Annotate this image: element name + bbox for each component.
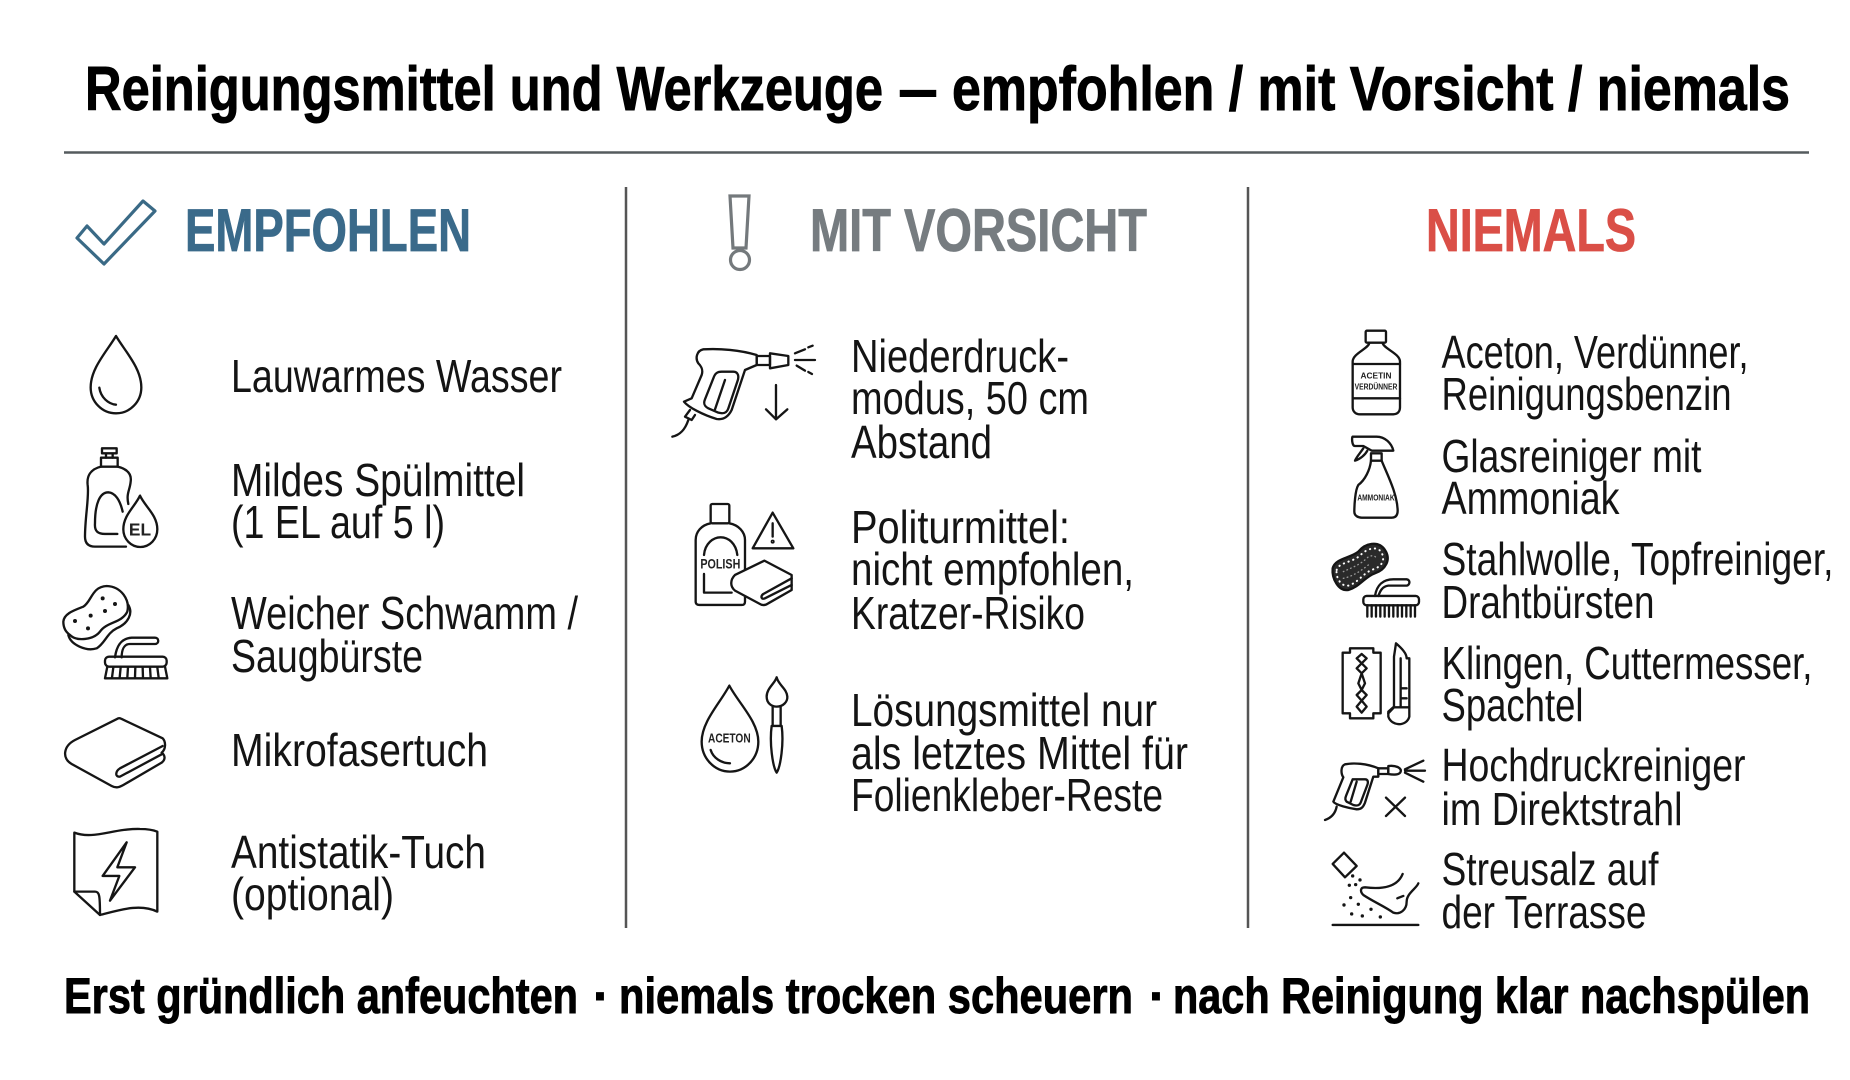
- text: weicher schwamm: Saugbürste: [231, 630, 423, 682]
- text: hochdruckreiniger: im Direktstrahl: [1442, 783, 1682, 835]
- text: glasreiniger: [1442, 430, 1702, 524]
- text: aceton: Aceton, Verdünner,: [1442, 326, 1748, 378]
- icon: high pressure washer crossed: [1325, 761, 1425, 820]
- text: stahlwolle: Drahtbürsten: [1442, 576, 1654, 628]
- title: —: [900, 55, 936, 124]
- icon: acetone drop and brush: ACETON: [708, 731, 751, 745]
- text: weicher schwamm: [231, 587, 578, 682]
- text: lösungsmittel: Lösungsmittel nur: [851, 684, 1157, 736]
- text: glasreiniger: Ammoniak: [1442, 472, 1620, 524]
- text: antistatik-tuch: (optional): [231, 868, 394, 920]
- icon: spray bottle: AMMONIAK: [1357, 493, 1395, 502]
- text: mildes spülmittel: (1 EL auf 5 l): [231, 496, 445, 548]
- text: antistatik-tuch: Antistatik-Tuch: [231, 826, 486, 878]
- footer note: niemals trocken scheuern: [619, 968, 1133, 1024]
- icon: steel wool and wire brush: [1333, 544, 1419, 617]
- text: niederdruck: Abstand: [851, 416, 992, 468]
- text: weicher schwamm: Weicher Schwamm /: [231, 587, 578, 639]
- text: glasreiniger: Glasreiniger mit: [1442, 430, 1702, 482]
- icon: solvent bottle: [1353, 331, 1400, 414]
- title: Reinigungsmittel und Werkzeuge: [85, 55, 883, 124]
- icon: antistatic cloth: [74, 829, 157, 915]
- text: mikrofasertuch: Mikrofasertuch: [231, 724, 488, 776]
- text: lösungsmittel: [851, 684, 1188, 821]
- text: antistatik-tuch: [231, 826, 486, 920]
- icon: exclamation mark: [730, 196, 750, 270]
- text: hochdruckreiniger: [1442, 739, 1746, 835]
- text: lösungsmittel: Folienkleber-Reste: [851, 769, 1163, 821]
- text: hochdruckreiniger: Hochdruckreiniger: [1442, 739, 1746, 791]
- icon: solvent bottle: VERDÜNNER: [1355, 382, 1397, 392]
- icon: microfiber towel: [65, 718, 165, 787]
- icon: sponge and brush: [63, 586, 167, 678]
- footer note: Erst gründlich anfeuchten: [64, 968, 578, 1024]
- icon: polish bottle with warning: POLISH: [700, 556, 740, 572]
- text: niederdruck: modus, 50 cm: [851, 372, 1089, 424]
- panel: niemals: [1325, 197, 1834, 938]
- text: streusalz: der Terrasse: [1442, 886, 1646, 938]
- text: politurmittel: [851, 501, 1134, 639]
- text: streusalz: [1442, 843, 1659, 938]
- icon: road salt on terrace: [1333, 853, 1418, 925]
- text: mildes spülmittel: Mildes Spülmittel: [231, 454, 525, 506]
- panel: mit vorsicht: [672, 196, 1188, 821]
- text: niederdruck: [851, 330, 1089, 468]
- icon: solvent bottle: ACETIN: [1360, 371, 1391, 381]
- icon: dish soap bottle with drop: EL: [129, 520, 151, 540]
- text: klingen: Spachtel: [1442, 679, 1584, 731]
- heading: mit vorsicht: MIT VORSICHT: [810, 197, 1147, 264]
- text: aceton: [1442, 326, 1748, 420]
- icon: spray bottle: [1352, 437, 1398, 518]
- icon: check mark: [77, 201, 155, 264]
- text: lösungsmittel: als letztes Mittel für: [851, 727, 1188, 779]
- heading: niemals: NIEMALS: [1426, 197, 1636, 264]
- icon: acetone drop and brush: [702, 677, 787, 773]
- footer note: ·: [1149, 968, 1166, 1024]
- footer note: [64, 968, 1810, 1024]
- text: politurmittel: nicht empfohlen,: [851, 543, 1134, 595]
- icon: razor blade and cutter: [1343, 643, 1409, 724]
- text: klingen: [1442, 637, 1812, 731]
- text: lauwarmes wasser: Lauwarmes Wasser: [231, 350, 562, 402]
- heading: empfohlen: EMPFOHLEN: [185, 197, 471, 264]
- icon: water drop: [91, 336, 141, 413]
- panel: empfohlen: [63, 197, 578, 920]
- text: politurmittel: Politurmittel:: [851, 501, 1070, 553]
- icon: pressure washer low pressure: [672, 346, 815, 437]
- footer note: ·: [593, 968, 610, 1024]
- text: politurmittel: Kratzer-Risiko: [851, 587, 1085, 639]
- text: streusalz: Streusalz auf: [1442, 843, 1659, 895]
- text: aceton: Reinigungsbenzin: [1442, 368, 1732, 420]
- title: [85, 55, 1790, 124]
- text: mildes spülmittel: [231, 454, 525, 548]
- icon: dish soap bottle with drop: [85, 448, 157, 547]
- icon: polish bottle with warning: [696, 504, 793, 605]
- text: niederdruck: Niederdruck-: [851, 330, 1069, 382]
- text: stahlwolle: [1442, 533, 1834, 628]
